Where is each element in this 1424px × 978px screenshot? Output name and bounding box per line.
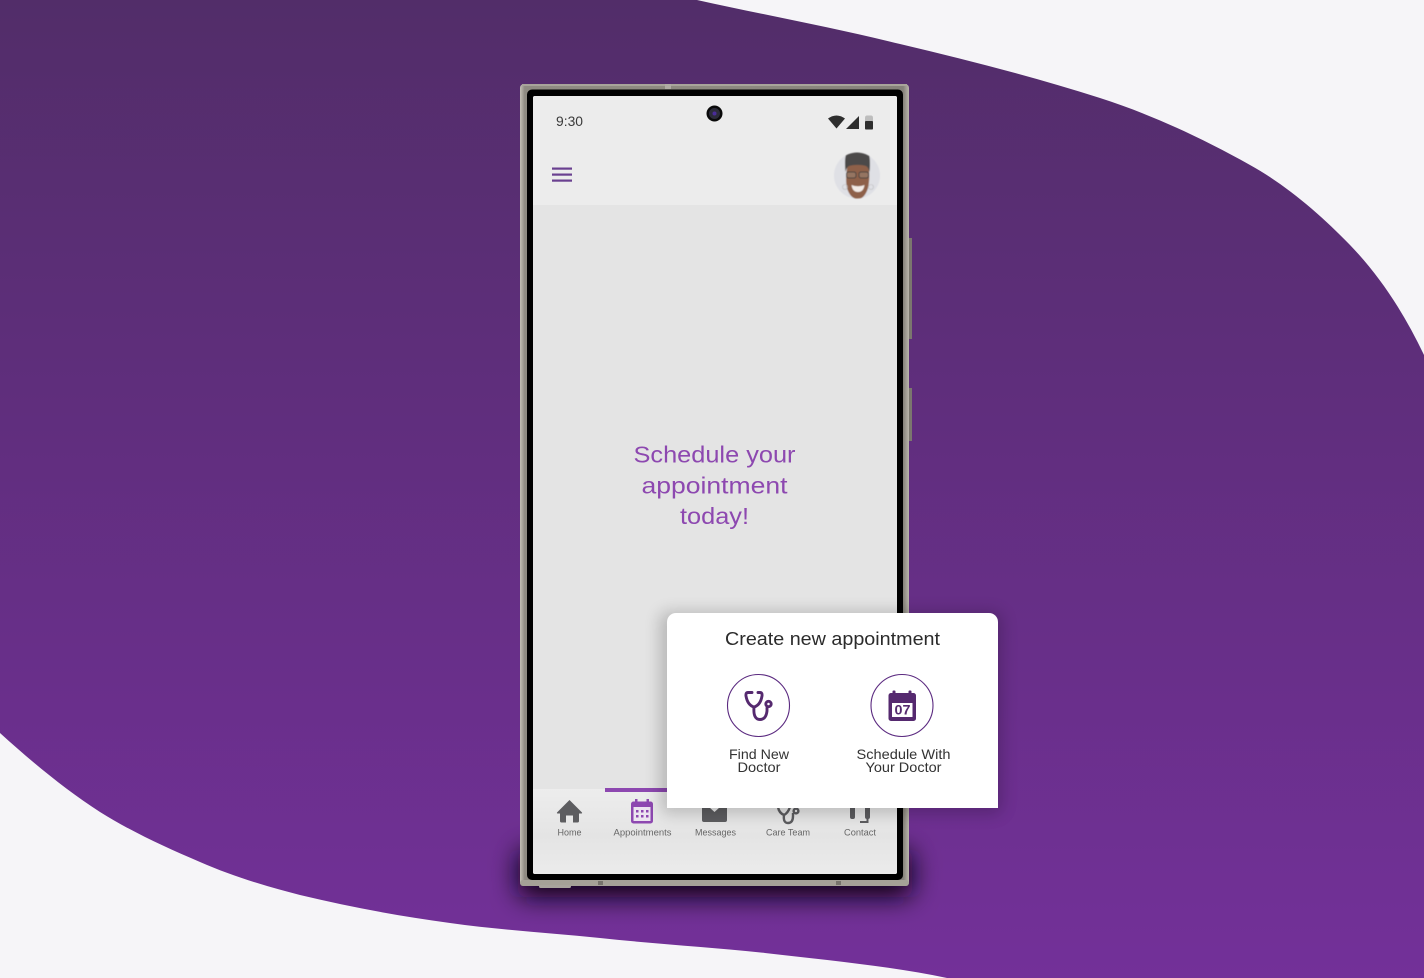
option: schedule with your doctor <box>856 674 950 775</box>
avatar <box>834 152 880 199</box>
card shadow <box>660 612 1002 814</box>
headline: Schedule your <box>634 442 796 468</box>
option: find new doctor <box>728 674 790 775</box>
headline: appointment <box>642 472 788 498</box>
headline: today! <box>680 503 749 529</box>
nav: contact: Contact <box>844 828 876 838</box>
nav: messages <box>695 806 736 838</box>
phone frame <box>520 84 909 886</box>
label <box>729 746 790 775</box>
nav: appointments: Appointments <box>614 828 672 838</box>
label: Doctor <box>738 759 781 775</box>
icon: stethoscope <box>746 692 771 720</box>
nav: appointments <box>614 799 672 838</box>
nav: contact <box>844 806 876 838</box>
icon: calendar: 07 <box>894 702 910 718</box>
nav: care team: Care Team <box>766 828 810 838</box>
active tab indicator <box>605 788 680 792</box>
phone <box>520 84 912 888</box>
card: create new appointment <box>667 613 998 808</box>
nav: home <box>557 800 582 838</box>
nav: care team <box>766 807 810 838</box>
label: Schedule With <box>856 746 950 762</box>
screen <box>533 96 897 874</box>
nav: home: Home <box>558 828 582 838</box>
icon: menu <box>552 168 572 182</box>
status time: 9:30 <box>556 113 583 129</box>
status icons <box>828 116 873 130</box>
bottom navigation <box>533 788 897 874</box>
camera <box>706 106 722 122</box>
label: Your Doctor <box>866 759 942 775</box>
label: Find New <box>729 746 790 762</box>
label <box>856 746 950 775</box>
nav: messages: Messages <box>695 828 736 838</box>
headline <box>634 442 796 529</box>
app header <box>533 96 897 205</box>
card title: Create new appointment <box>725 629 940 649</box>
phone shadow <box>518 850 912 897</box>
